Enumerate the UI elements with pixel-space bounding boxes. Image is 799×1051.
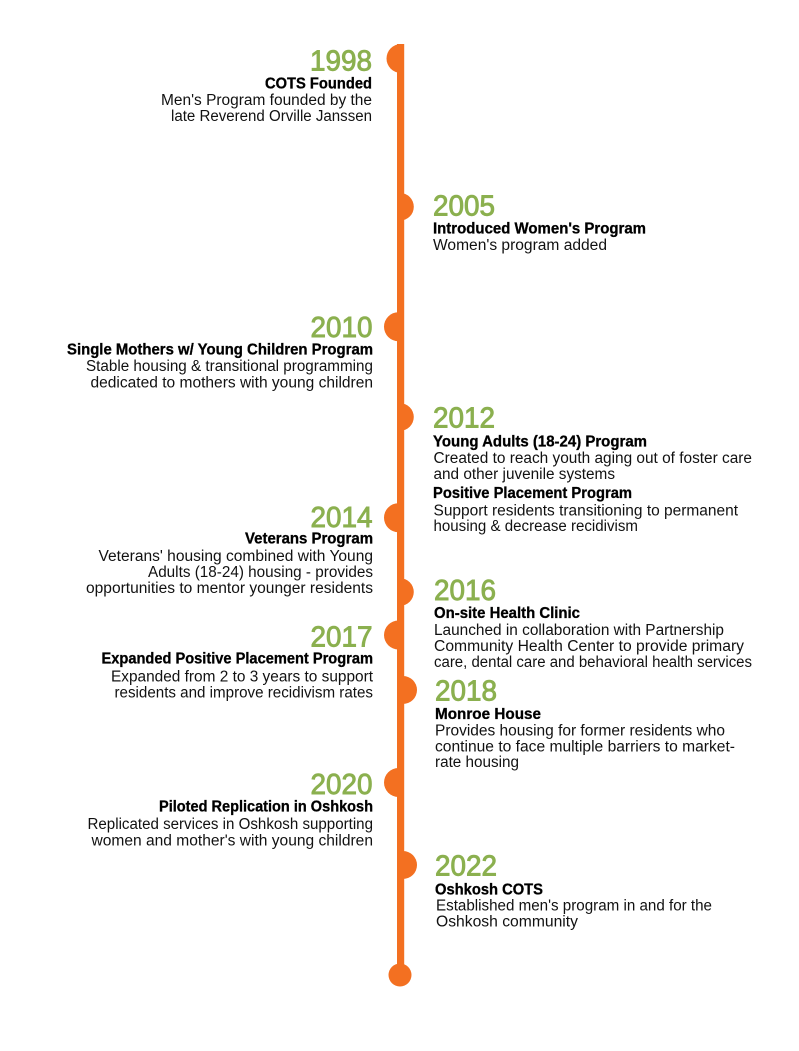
entry: 2005 (433, 191, 646, 254)
description: care, dental care and behavioral health services (434, 654, 752, 671)
description: Established men's program in and for the (436, 898, 712, 914)
marker 2020 (384, 768, 398, 797)
year 2022: 2022 (435, 851, 497, 883)
description: young adults (434, 450, 752, 483)
heading: Monroe House (435, 706, 541, 723)
entry: 2017 (102, 622, 374, 702)
description (86, 548, 373, 597)
year 2016: 2016 (434, 575, 496, 607)
entry: 2020 (88, 769, 373, 850)
description: dedicated to mothers with young children (90, 374, 373, 392)
year 2005: 2005 (433, 191, 495, 223)
description: Women's program added (433, 237, 607, 254)
description: Expanded from 2 to 3 years to support (111, 668, 374, 686)
description: rate housing (435, 754, 519, 771)
end dot (388, 964, 412, 986)
description: women and mother's with young children (90, 832, 373, 850)
description (435, 722, 735, 771)
description: Veterans' housing combined with Young (98, 548, 373, 565)
marker 1998 (386, 44, 401, 73)
entry: 2010 (67, 312, 373, 392)
entry: 2016 (434, 575, 752, 671)
year 2018: 2018 (435, 676, 497, 708)
description: Stable housing & transitional programming (86, 358, 373, 375)
entry: 1998 (161, 46, 372, 125)
vertical orange line (397, 44, 404, 969)
year 2012: 2012 (433, 402, 495, 434)
heading: Introduced Women's Program (433, 221, 646, 238)
heading: Single Mothers w/ Young Children Program (67, 342, 373, 358)
description (161, 92, 372, 125)
entry: 2012 (433, 402, 752, 535)
description: continue to face multiple barriers to market- (435, 738, 735, 756)
heading: Piloted Replication in Oshkosh (159, 799, 373, 816)
marker 2010 (384, 312, 398, 341)
description: Adults (18-24) housing - provides (148, 564, 373, 581)
year 2010: 2010 (310, 312, 372, 344)
description: Launched in collaboration with Partnership (434, 622, 724, 639)
heading: On-site Health Clinic (434, 605, 580, 622)
heading: COTS Founded (265, 76, 372, 92)
description: residents and improve recidivism rates (114, 684, 373, 702)
entry: 2014 (86, 502, 373, 597)
description (111, 668, 374, 702)
marker 2018 (403, 676, 417, 704)
heading: Expanded Positive Placement Program (102, 651, 373, 668)
description: opportunities to mentor younger residents (86, 580, 373, 597)
entry: 2022 (435, 851, 712, 930)
heading: Oshkosh COTS (435, 881, 543, 898)
description: young adults: and other juvenile systems (434, 466, 615, 483)
description: positive placement: Support residents transitioning to permanent (434, 502, 739, 520)
marker 2022 (403, 851, 417, 879)
heading: young adults: Young Adults (18-24) Program (433, 434, 647, 450)
marker 2012 (400, 403, 414, 431)
year 2020: 2020 (310, 769, 372, 801)
year 1998: 1998 (310, 46, 372, 78)
description: Replicated services in Oshkosh supporting (88, 816, 373, 833)
marker 2014 (384, 503, 398, 532)
description: late Reverend Orville Janssen (171, 108, 372, 125)
description: Men's Program founded by the (161, 92, 372, 109)
heading: Veterans Program (245, 530, 373, 548)
entry: 2018 (435, 676, 735, 771)
description: positive placement: housing & decrease recidivism (434, 518, 638, 535)
year 2017: 2017 (310, 622, 372, 654)
description: Community Health Center to provide primary (434, 638, 744, 655)
description (434, 622, 752, 671)
marker 2016 (400, 578, 414, 606)
description: positive placement (434, 502, 739, 535)
description (88, 816, 373, 850)
heading: positive placement: Positive Placement Program (433, 485, 632, 502)
marker 2005 (400, 193, 414, 221)
description: young adults: Created to reach youth aging out of foster care (434, 450, 752, 467)
description: Oshkosh community (436, 914, 578, 930)
description: Provides housing for former residents who (435, 722, 725, 740)
timeline axis with markers (384, 44, 417, 986)
marker 2017 (384, 620, 398, 650)
description (436, 898, 712, 930)
year 2014: 2014 (310, 502, 372, 534)
description (86, 358, 373, 392)
